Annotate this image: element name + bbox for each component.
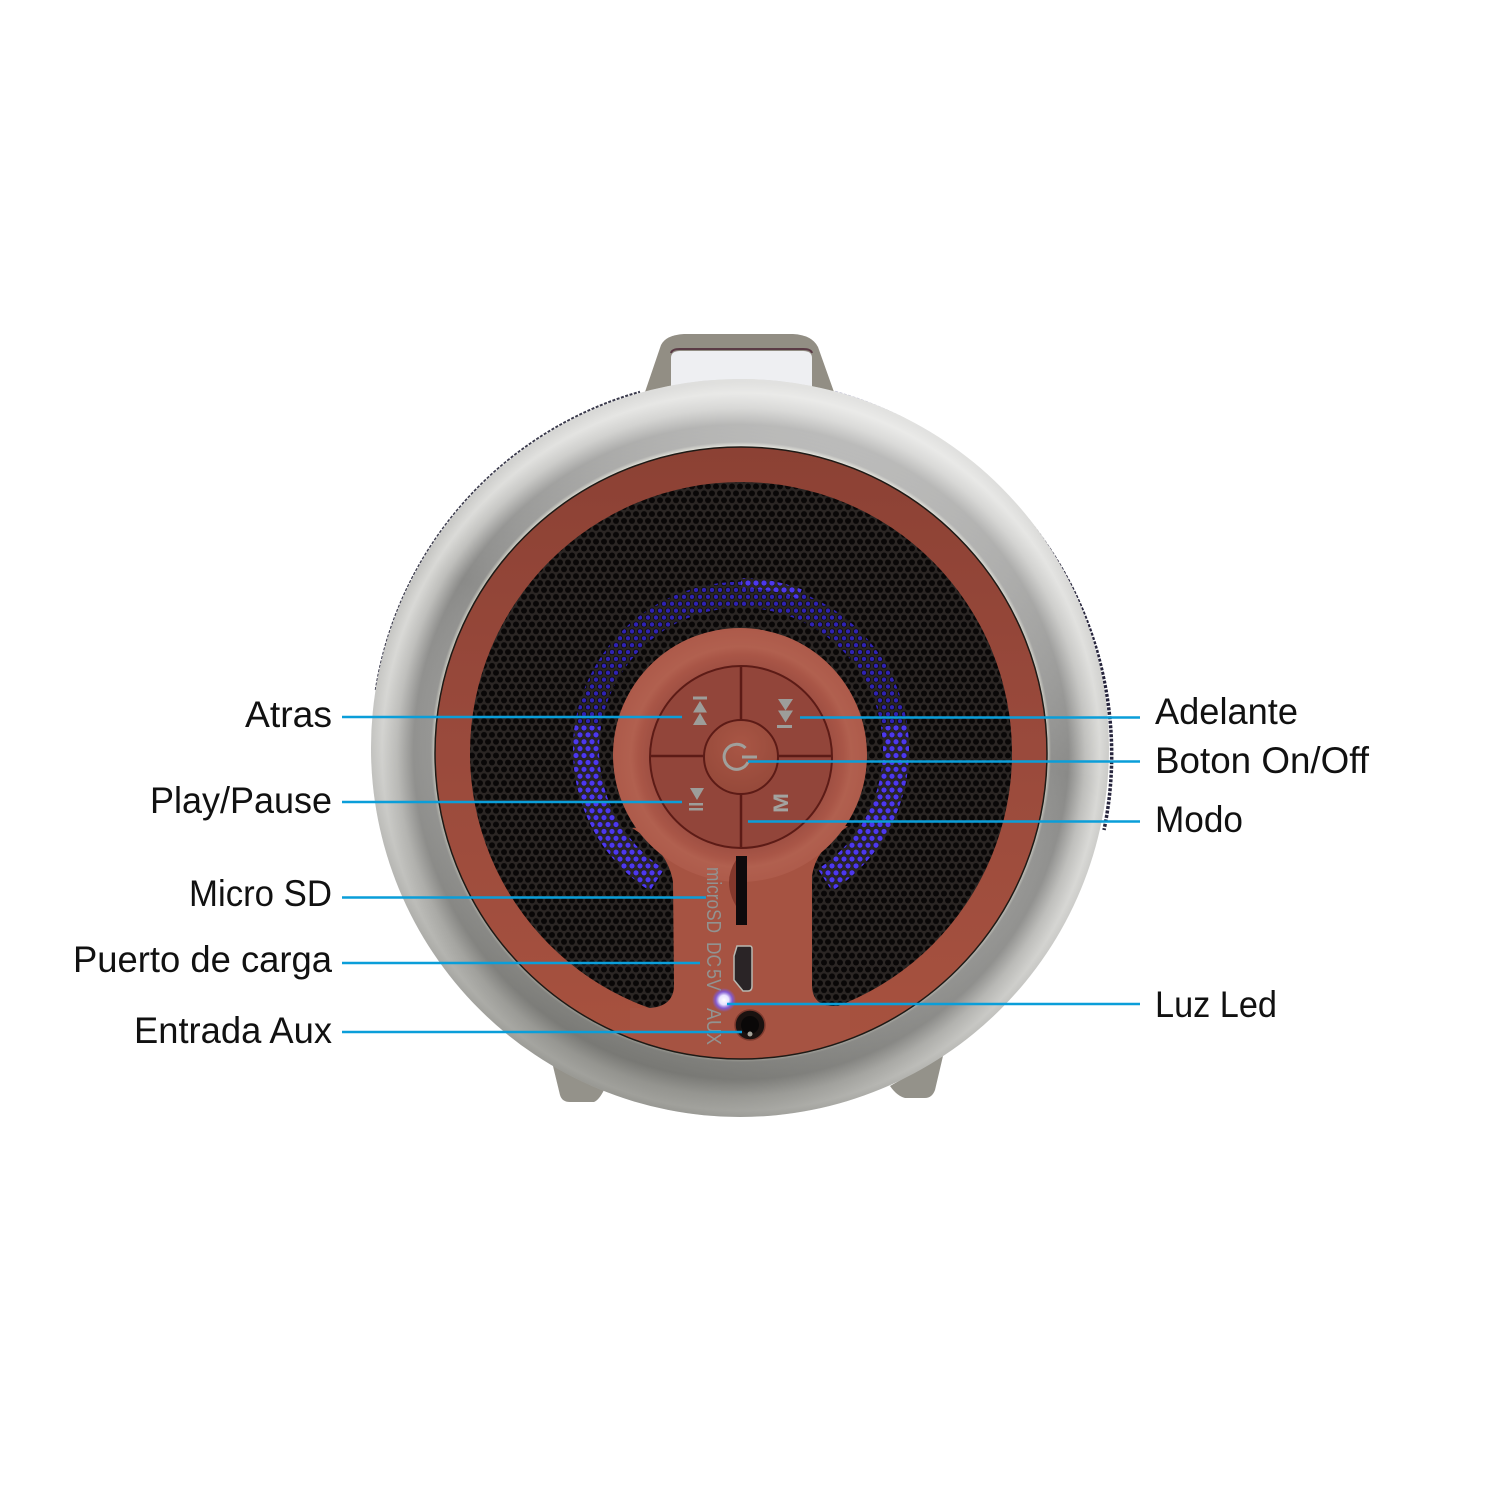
callout lines <box>342 717 1140 1032</box>
blue led ring <box>586 583 896 880</box>
port labels printed: AUX <box>702 1008 724 1045</box>
infographic: speaker control diagram <box>76 334 1370 1117</box>
port labels printed: DC <box>702 942 724 967</box>
fabric edge <box>376 392 1112 830</box>
control disc <box>613 628 867 882</box>
aux jack <box>735 1010 765 1040</box>
feet <box>552 1056 943 1102</box>
label: Boton On/Off: Boton On/Off <box>1155 740 1370 781</box>
icon: next <box>777 699 793 728</box>
label: Micro SD: Micro SD <box>189 873 332 914</box>
control stem <box>632 826 848 1050</box>
status led <box>712 988 736 1012</box>
icon: previous <box>693 696 707 725</box>
port labels printed <box>702 867 724 1045</box>
label: Modo: Modo <box>1155 799 1243 840</box>
icon: mode M: M <box>770 793 793 813</box>
label: Atras: Atras <box>245 694 332 735</box>
power button <box>704 720 778 794</box>
port labels printed: 5V <box>702 969 724 992</box>
label: Entrada Aux: Entrada Aux <box>134 1010 332 1051</box>
speaker photo illustration <box>371 334 1112 1117</box>
label: Play/Pause: Play/Pause <box>150 780 332 821</box>
label: Puerto de carga: Puerto de carga <box>73 939 332 980</box>
icon: play pause <box>689 788 704 810</box>
charging port <box>734 946 752 991</box>
silver outer ring <box>371 379 1109 1117</box>
speaker mesh grille <box>470 482 1012 1024</box>
port labels printed: microSD <box>702 867 724 933</box>
micro sd slot <box>729 856 747 925</box>
button cluster <box>650 666 832 848</box>
label: Adelante: Adelante <box>1155 691 1298 732</box>
red rubber ring <box>435 447 1047 1059</box>
label: Luz Led: Luz Led <box>1155 984 1277 1025</box>
handle <box>645 334 834 392</box>
